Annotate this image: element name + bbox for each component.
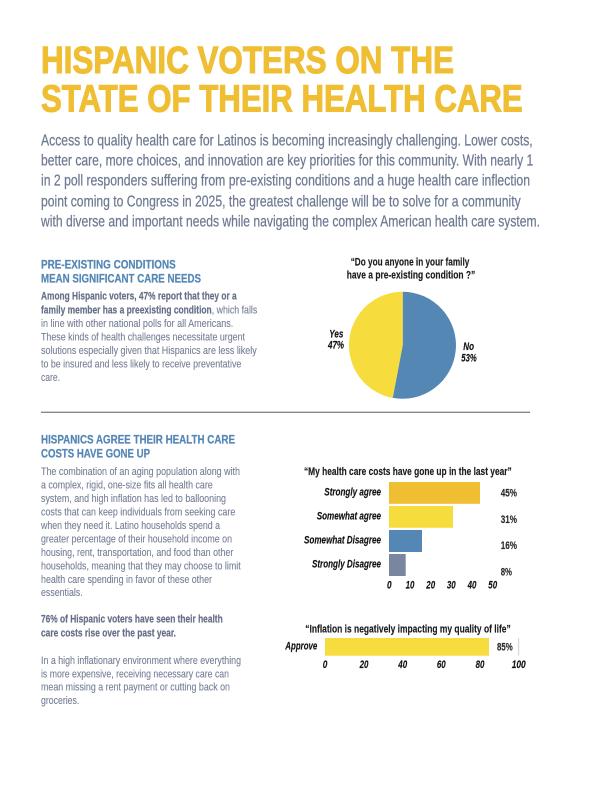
heading: costs have gone up bbox=[41, 433, 235, 461]
text block: costs body: households, meaning that they may choose to limit bbox=[41, 560, 241, 572]
bar: somewhat agree 31%: 31% bbox=[501, 514, 517, 526]
text block: pre-existing conditions body: solutions especially given that Hispanics are less likely bbox=[41, 345, 257, 357]
bar chart axis labels: 20 bbox=[426, 580, 435, 592]
intro paragraph bbox=[40, 133, 540, 231]
text block: pre-existing conditions body bbox=[41, 291, 258, 384]
bar: strongly disagree 8%: 8% bbox=[501, 566, 512, 578]
panel: pie chart bbox=[327, 257, 477, 399]
bar: somewhat disagree 16%: 16% bbox=[501, 540, 517, 552]
text block: costs body: essentials. bbox=[41, 587, 83, 599]
pie chart title bbox=[347, 257, 475, 282]
callout: 76% stat: care costs rise over the past year. bbox=[41, 628, 176, 640]
pie chart title: “Do you anyone in your family bbox=[351, 257, 469, 269]
text block: costs body: The combination of an aging population along with bbox=[41, 466, 240, 478]
bar: strongly agree 45%: 45% bbox=[501, 488, 517, 500]
text block: costs body: system, and high inflation has led to ballooning bbox=[41, 493, 226, 505]
inflation chart axis labels: 100 bbox=[512, 659, 526, 671]
text block: pre-existing conditions body: to be insured and less likely to receive preventative bbox=[41, 359, 241, 371]
bar: strongly disagree 8%: Strongly Disagree bbox=[312, 559, 381, 571]
heading: costs have gone up: HISPANICS AGREE THEIR HEALTH CARE bbox=[41, 433, 235, 447]
text block: costs body: when they need it. Latino households spend a bbox=[40, 520, 220, 532]
pie label: Yes: Yes bbox=[329, 329, 343, 341]
bar chart title: “My health care costs have gone up in the last year” bbox=[304, 466, 512, 478]
text block: pre-existing conditions body: family member has a preexisting condition bbox=[41, 305, 212, 317]
text block: costs body: health care spending in favor of these other bbox=[41, 574, 212, 586]
title: HISPANIC VOTERS ON THE bbox=[41, 40, 454, 82]
text block: closing paragraph: mean missing a rent payment or cutting back on bbox=[41, 682, 230, 694]
inflation chart axis labels: 20 bbox=[359, 659, 368, 671]
bar: approve 85%: 85% bbox=[497, 642, 513, 654]
panel: health care costs text bbox=[40, 433, 241, 707]
text block: closing paragraph: is more expensive, receiving necessary care can bbox=[41, 668, 229, 680]
callout: 76% stat: 76% of Hispanic voters have seen their health bbox=[41, 614, 223, 626]
bar: somewhat agree 31%: Somewhat agree bbox=[317, 510, 381, 522]
pie slice: Yes 47% bbox=[349, 292, 403, 398]
bar chart axis labels: 50 bbox=[488, 580, 497, 592]
pie label: No: No bbox=[463, 341, 474, 353]
text block: pre-existing conditions body: Among Hispanic voters, 47% report that they or a bbox=[41, 291, 237, 303]
bar: somewhat disagree 16% bbox=[304, 530, 517, 552]
bar chart axis labels bbox=[387, 580, 497, 592]
text block: closing paragraph: In a high inflationary environment where everything bbox=[41, 655, 241, 667]
inflation chart axis labels: 60 bbox=[437, 659, 446, 671]
pie slice: No 53% bbox=[393, 292, 456, 399]
bar: approve 85% bbox=[285, 638, 519, 656]
inflation chart axis labels: 80 bbox=[476, 659, 484, 671]
pie chart title: have a pre-existing condition ?” bbox=[347, 270, 475, 282]
bar: strongly agree 45% bbox=[324, 482, 517, 504]
bar: somewhat agree 31% bbox=[317, 506, 517, 528]
title: STATE OF THEIR HEALTH CARE bbox=[41, 79, 523, 121]
inflation chart axis labels: 0 bbox=[323, 659, 327, 671]
text block: costs body: greater percentage of their household income on bbox=[41, 534, 232, 546]
bar chart axis labels: 0 bbox=[387, 580, 392, 592]
pie label: No: 53% bbox=[461, 353, 477, 365]
text block: pre-existing conditions body: , which falls bbox=[212, 305, 258, 317]
panel: pre-existing conditions text bbox=[41, 257, 258, 384]
text block: costs body: costs that can keep individuals from seeking care bbox=[41, 506, 235, 518]
bar: strongly agree 45%: Strongly agree bbox=[324, 487, 381, 499]
text block: costs body: a complex, rigid, one-size fits all health care bbox=[41, 480, 213, 492]
heading: pre-existing conditions bbox=[41, 257, 201, 285]
bar chart axis labels: 10 bbox=[406, 580, 414, 592]
pie label: Yes: 47% bbox=[327, 340, 344, 352]
heading: costs have gone up: COSTS HAVE GONE UP bbox=[41, 447, 150, 461]
text block: closing paragraph: groceries. bbox=[41, 695, 79, 707]
pie label: No bbox=[461, 341, 477, 365]
inflation chart title: “Inflation is negatively impacting my quality of life” bbox=[305, 623, 511, 635]
text block: closing paragraph bbox=[41, 655, 241, 707]
inflation chart axis labels: 40 bbox=[398, 659, 407, 671]
inflation chart axis labels bbox=[323, 659, 526, 671]
bar: approve 85%: Approve bbox=[285, 641, 317, 653]
panel: bar chart health care costs bbox=[304, 466, 517, 592]
panel: bar chart inflation bbox=[285, 623, 526, 671]
title bbox=[41, 40, 523, 121]
callout: 76% stat bbox=[41, 614, 223, 640]
text block: pre-existing conditions body: in line with other national polls for all Americans. bbox=[41, 318, 233, 330]
text block: pre-existing conditions body: care. bbox=[41, 372, 60, 384]
bar: strongly disagree 8% bbox=[312, 554, 512, 578]
heading: pre-existing conditions: PRE-EXISTING CONDITIONS bbox=[41, 257, 176, 271]
text block: pre-existing conditions body: These kinds of health challenges necessitate urgent bbox=[41, 332, 245, 344]
bar: somewhat disagree 16%: Somewhat Disagree bbox=[304, 535, 381, 547]
text block: costs body bbox=[40, 466, 241, 599]
bar chart axis labels: 30 bbox=[447, 580, 456, 592]
bar chart axis labels: 40 bbox=[467, 580, 476, 592]
heading: pre-existing conditions: MEAN SIGNIFICANT CARE NEEDS bbox=[41, 271, 201, 285]
text block: costs body: housing, rent, transportation, and food than other bbox=[41, 547, 234, 559]
pie label: Yes bbox=[327, 329, 344, 352]
